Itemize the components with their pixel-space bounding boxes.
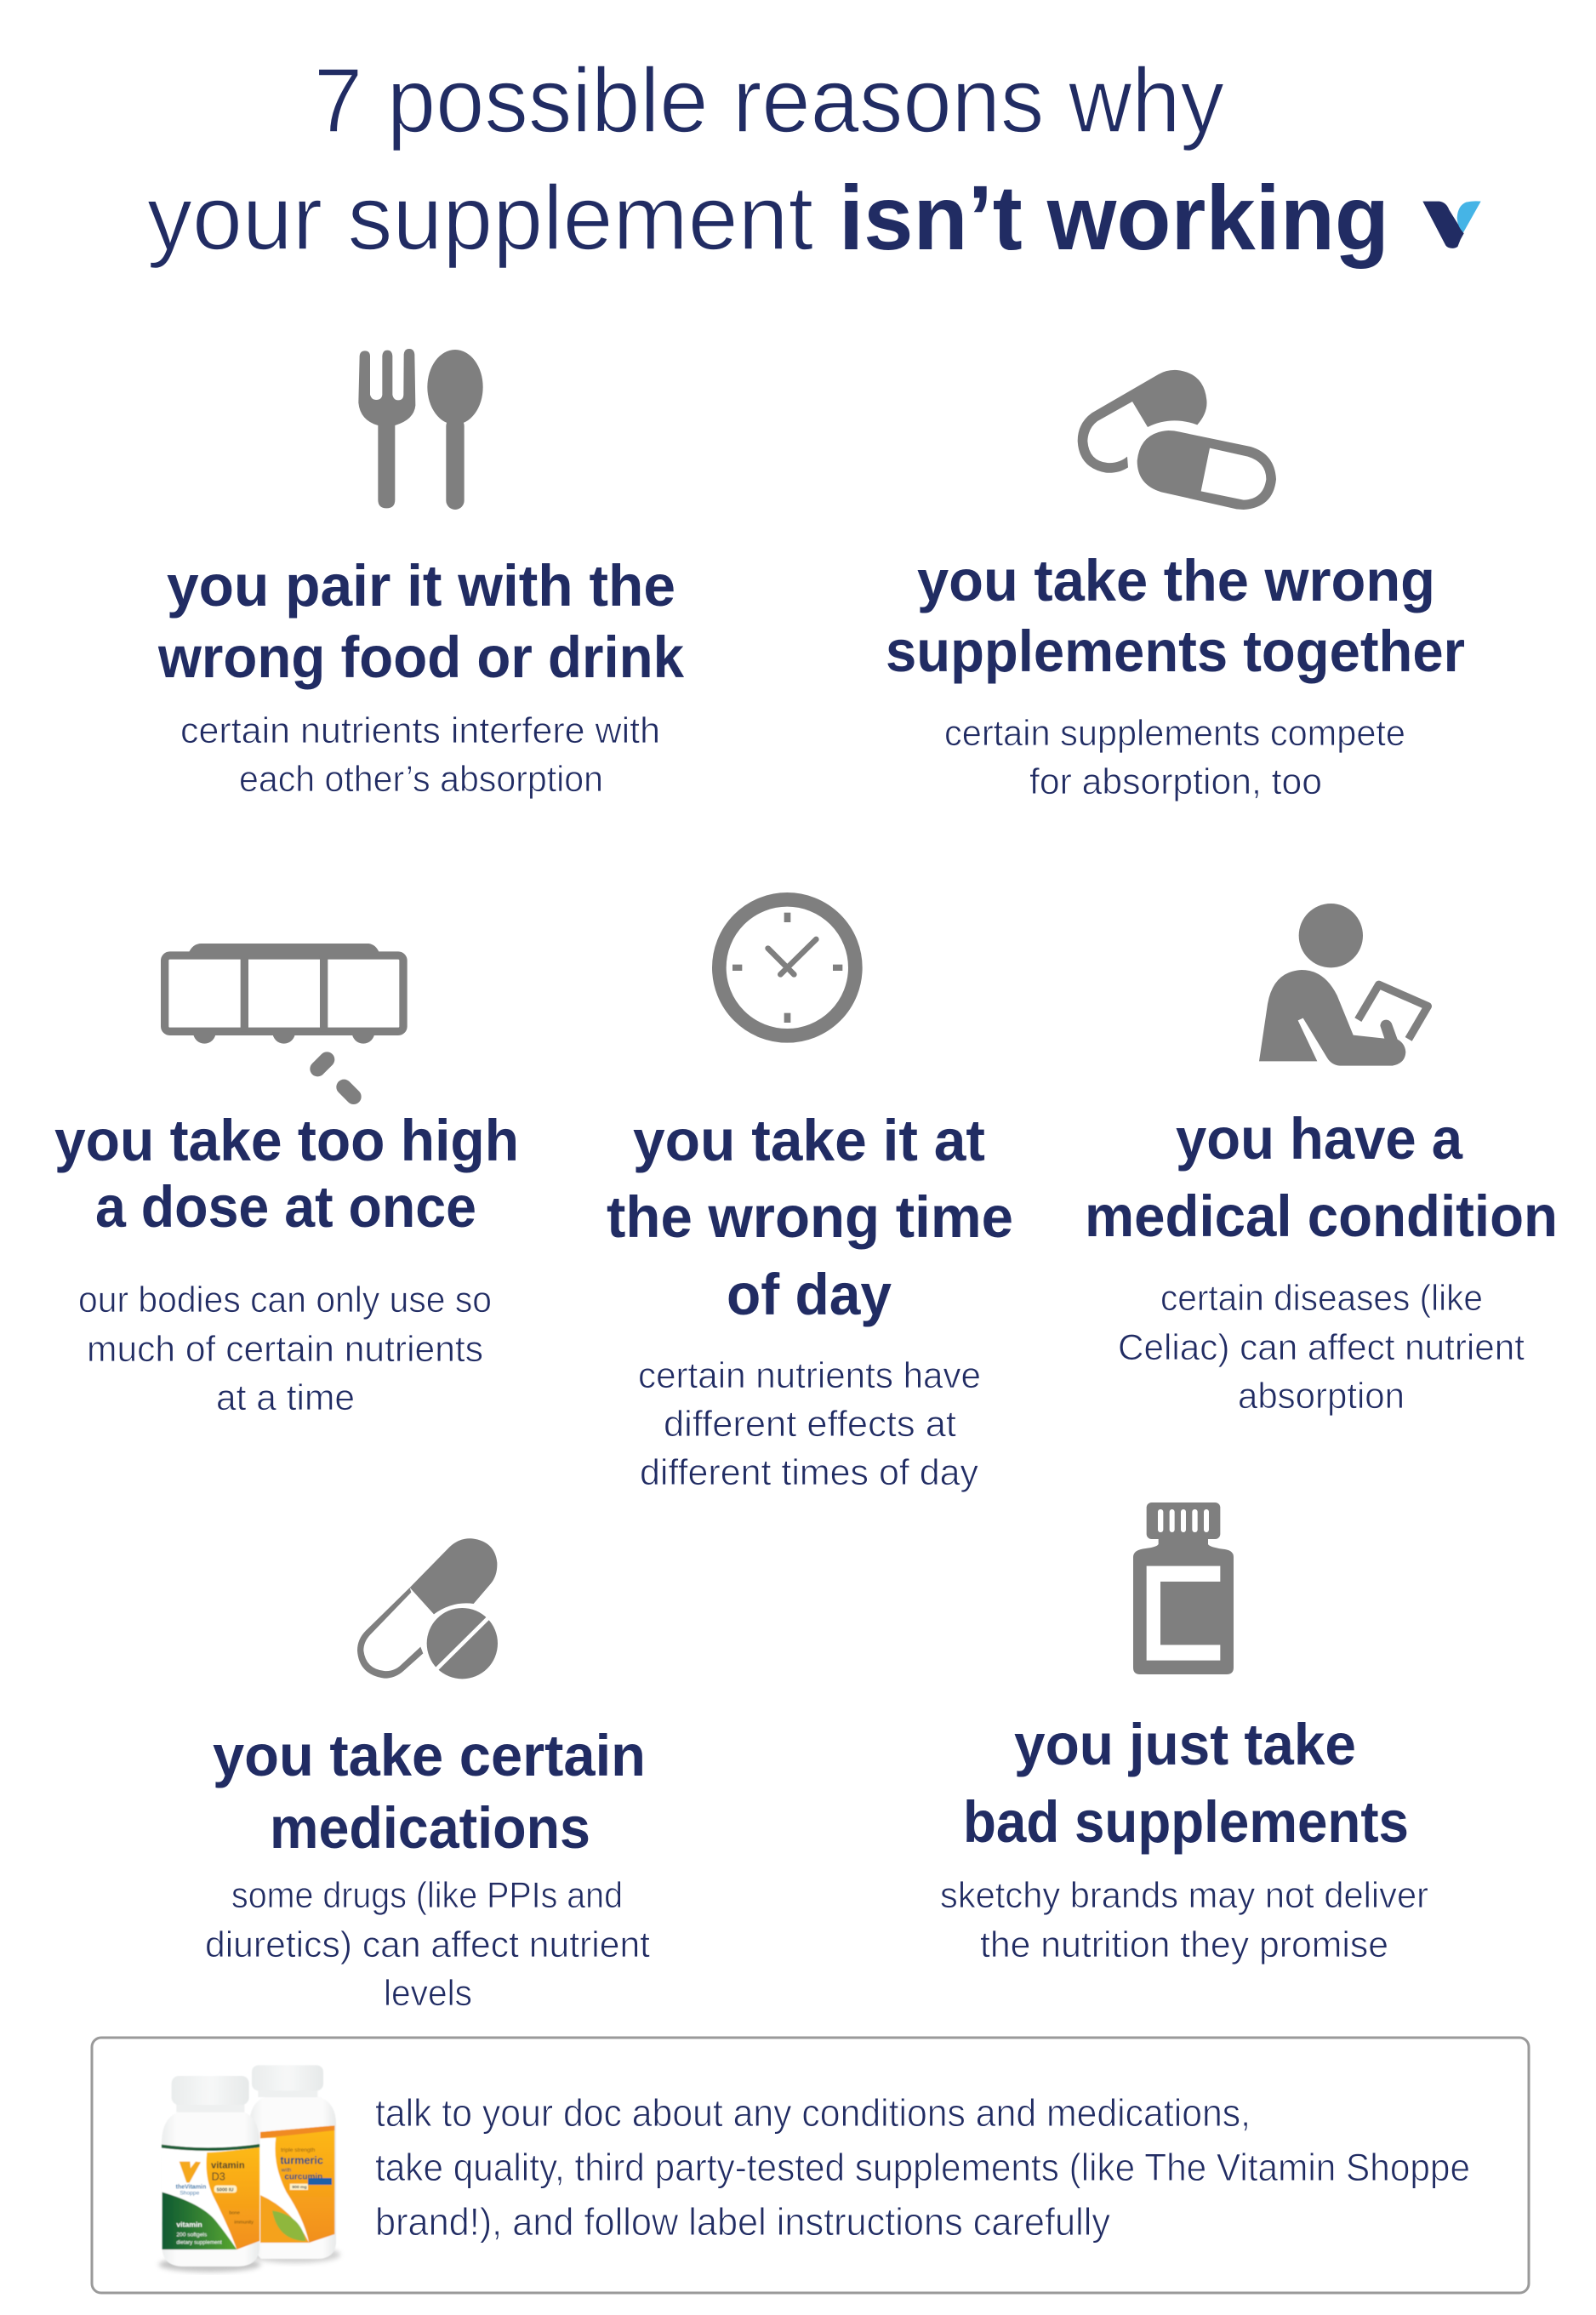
heading: you pair it with the [167,553,675,619]
back bottle: turmeric: curcumin [284,2173,322,2182]
body text: certain nutrients have [638,1355,981,1396]
body text [1118,1278,1525,1417]
heading: you take it at [633,1108,985,1173]
icon: two capsules [1078,370,1276,510]
heading [54,1108,519,1240]
product bottles [159,2065,340,2272]
body text: diuretics) can affect nutrient [205,1924,650,1965]
panel: medical condition [1085,904,1558,1417]
icon: pill organizer [165,944,403,1097]
heading: of day [727,1262,892,1327]
front bottle: vitamin D3: 200 softgels [176,2232,208,2238]
heading: you take certain [213,1723,646,1788]
panel: wrong food or drink [157,349,685,800]
heading: you take too high [54,1108,519,1173]
callout text: talk to your doc about any conditions and medications, [375,2091,1251,2135]
body text: certain diseases (like [1160,1278,1483,1319]
callout text [375,2091,1470,2244]
heading [1085,1106,1558,1249]
panel: wrong time of day [607,899,1013,1493]
panel: too high a dose [54,944,519,1418]
heading: supplements together [886,619,1465,684]
front bottle: vitamin D3: D3 [212,2171,225,2183]
body text: Celiac) can affect nutrient [1118,1327,1525,1368]
callout box [92,2038,1529,2293]
callout text: brand!), and follow label instructions carefully [375,2200,1110,2244]
panel: wrong supplements together [886,370,1465,802]
heading: a dose at once [95,1174,476,1240]
body text: at a time [216,1377,355,1418]
body text: absorption [1238,1376,1405,1417]
body text: some drugs (like PPIs and [231,1875,623,1916]
body text [638,1355,981,1493]
heading: medications [270,1795,590,1861]
icon: capsule and tablet [357,1538,498,1679]
title: isn’t working [839,166,1389,269]
front bottle: vitamin D3: immunity [234,2220,254,2225]
body text [78,1280,492,1418]
callout [92,2038,1529,2293]
body text: levels [384,1973,472,2014]
front bottle: vitamin D3: Shoppe [180,2190,200,2196]
body text: certain supplements compete [944,713,1405,754]
front bottle: vitamin D3: vitamin [176,2220,202,2228]
body text: different times of day [640,1452,978,1493]
front bottle: vitamin D3: bone [229,2211,240,2216]
callout text: take quality, third party-tested supplements (like The Vitamin Shoppe [375,2146,1470,2189]
body text: the nutrition they promise [980,1924,1388,1965]
body text: sketchy brands may not deliver [940,1875,1428,1916]
title: your supplement [147,166,813,269]
body text: each other’s absorption [239,759,603,800]
back bottle: turmeric [249,2065,340,2263]
front bottle: vitamin D3: theVitamin [176,2185,206,2191]
heading: bad supplements [963,1789,1409,1855]
icon: V logo [1422,201,1481,248]
front bottle: vitamin D3 [159,2076,261,2272]
heading: wrong food or drink [157,624,685,690]
heading: the wrong time [607,1184,1013,1250]
body text: for absorption, too [1029,761,1322,802]
heading: you take the wrong [917,548,1435,613]
icon: person with tablet [1259,904,1428,1066]
panel: certain medications [205,1538,650,2014]
icon: supplement bottle [1133,1502,1234,1674]
heading [886,548,1465,684]
heading: you just take [1014,1712,1356,1777]
back bottle: turmeric: turmeric [280,2154,323,2166]
body text [205,1875,650,2014]
body text [180,710,660,800]
icon: fork and spoon [358,349,483,510]
icon: clock [719,899,855,1035]
front bottle: vitamin D3: dietary supplement [176,2239,222,2245]
heading [213,1723,646,1861]
body text [944,713,1405,802]
title [147,48,1389,269]
front bottle: vitamin D3: vitamin [211,2160,245,2170]
heading [963,1712,1409,1855]
back bottle: turmeric: 900 mg [292,2185,307,2190]
back bottle: turmeric: with [281,2168,292,2174]
body text [940,1875,1428,1965]
body text: certain nutrients interfere with [180,710,660,751]
heading [607,1108,1013,1327]
title: 7 possible reasons why [314,48,1224,151]
heading: you have a [1176,1106,1463,1172]
body text: our bodies can only use so [78,1280,492,1320]
front bottle: vitamin D3: 5000 IU [217,2187,233,2192]
panel: bad supplements [940,1502,1428,1965]
body text: much of certain nutrients [87,1329,483,1370]
heading: medical condition [1085,1183,1558,1249]
back bottle: turmeric: triple strength [281,2147,316,2153]
heading [157,553,685,690]
body text: different effects at [664,1404,956,1445]
